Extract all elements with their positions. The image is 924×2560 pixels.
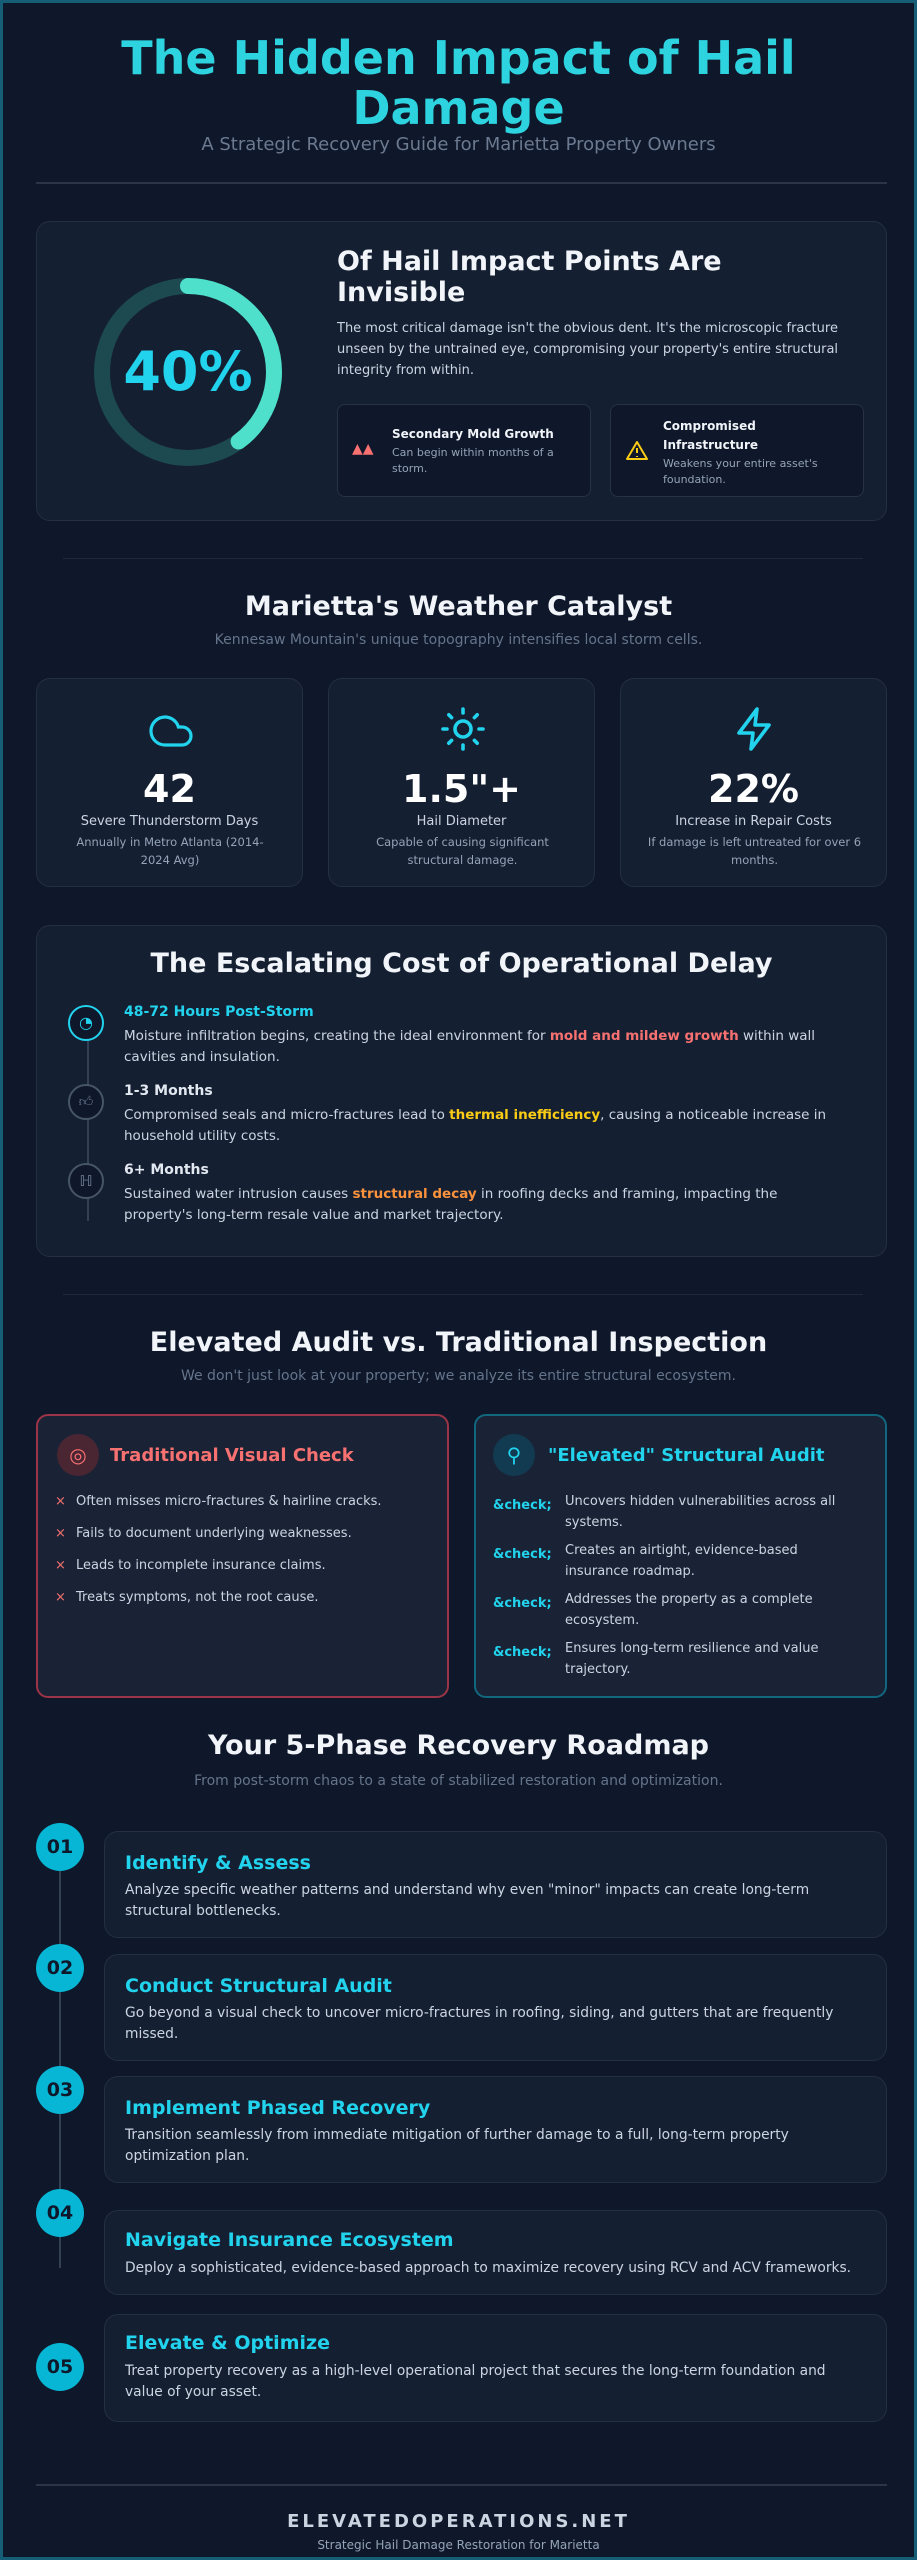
- panel: elevated: [474, 1414, 887, 1698]
- item: 48-72 hours: Moisture infiltration begins, creating the ideal environment for mold and mildew growth within wall cavities and insulation.: [124, 1028, 815, 1065]
- icon: sun: [441, 707, 485, 751]
- item: 48-72 hours: [68, 1004, 815, 1065]
- list: cons: Often misses micro-fractures & hairline cracks.: [76, 1494, 382, 1509]
- list: cons: ×: [55, 1558, 66, 1573]
- icon: thumb: 👍︎: [79, 1094, 93, 1110]
- gauge chart: 40%: [123, 340, 253, 403]
- step 1: [36, 1823, 887, 1938]
- step 3: [36, 2066, 887, 2183]
- icon: eye: ◎: [69, 1443, 87, 1467]
- title: [121, 31, 796, 135]
- list: pros: [493, 1494, 835, 1677]
- panel: elevated: Creates an airtight, evidence-based insurance roadmap.: [565, 1543, 798, 1579]
- icon: search: [493, 1434, 535, 1476]
- footer: ELEVATEDOPERATIONS.NET: [287, 2511, 630, 2532]
- gauge chart: [94, 278, 282, 466]
- mini card: mold: [337, 404, 591, 497]
- heading: The Escalating Cost of Operational Delay: [150, 948, 772, 979]
- item: 1-3 months: 1-3 Months: [124, 1083, 213, 1099]
- list: cons: ×: [55, 1494, 66, 1509]
- panel: traditional: [36, 1414, 449, 1698]
- list: cons: ×: [55, 1526, 66, 1541]
- panel: cost of delay: [36, 925, 887, 1257]
- title: Damage: [352, 81, 565, 135]
- step 5: [36, 2314, 887, 2422]
- step 3: 03: [47, 2079, 73, 2101]
- panel: 40% invisible: [36, 221, 887, 521]
- panel: elevated: "Elevated" Structural Audit: [548, 1445, 824, 1466]
- stat card: 22%: If damage is left untreated for over 6 months.: [648, 835, 861, 867]
- item: 6+ months: Sustained water intrusion causes structural decay in roofing decks and framing, impacting the property's long-term resale value and market trajectory.: [124, 1186, 777, 1223]
- stat card: 22%: 22%: [708, 767, 799, 811]
- panel: elevated: &check;: [493, 1498, 552, 1513]
- heading: weather: Marietta's Weather Catalyst: [245, 591, 672, 622]
- step 3: Transition seamlessly from immediate mitigation of further damage to a full, long-term property optimization plan.: [125, 2127, 789, 2164]
- title: The Hidden Impact of Hail: [121, 31, 796, 85]
- stat card: 1.5: Capable of causing significant structural damage.: [376, 835, 549, 867]
- panel: elevated: Ensures long-term resilience and value trajectory.: [565, 1641, 818, 1677]
- item: 6+ months: 6+ Months: [124, 1162, 209, 1178]
- icon: building: [68, 1163, 104, 1199]
- subheading: We don't just look at your property; we analyze its entire structural ecosystem.: [181, 1368, 736, 1384]
- step 5: Elevate & Optimize: [125, 2332, 330, 2354]
- icon: warning: [626, 441, 648, 460]
- step 2: Conduct Structural Audit: [125, 1975, 392, 1997]
- icon: clock: ◔: [79, 1013, 93, 1032]
- step 1: Identify & Assess: [125, 1852, 311, 1874]
- item: 1-3 months: [68, 1083, 826, 1144]
- panel: traditional: Traditional Visual Check: [110, 1445, 354, 1466]
- list: cons: Leads to incomplete insurance claims.: [76, 1558, 326, 1573]
- step 4: Navigate Insurance Ecosystem: [125, 2229, 454, 2251]
- mini card: infrastructure: Weakens your entire asset's foundation.: [663, 457, 818, 486]
- icon: thumb: [68, 1084, 104, 1120]
- heading: roadmap: Your 5-Phase Recovery Roadmap: [208, 1730, 709, 1761]
- step 4: Deploy a sophisticated, evidence-based approach to maximize recovery using RCV and ACV frameworks.: [125, 2260, 851, 2276]
- stat card: 22%: [620, 678, 887, 887]
- stat card: 42: Annually in Metro Atlanta (2014-2024 Avg): [76, 835, 264, 867]
- item: 48-72 hours: 48-72 Hours Post-Storm: [124, 1004, 314, 1020]
- step 3: Implement Phased Recovery: [125, 2097, 430, 2119]
- step 2: Go beyond a visual check to uncover micro-fractures in roofing, siding, and gutters that are frequently missed.: [125, 2005, 833, 2042]
- panel: elevated: &check;: [493, 1645, 552, 1660]
- stat card: 42: [36, 678, 303, 887]
- panel: elevated: &check;: [493, 1547, 552, 1562]
- step 1: 01: [47, 1836, 73, 1858]
- step 2: [36, 1944, 887, 2061]
- step 4: 04: [47, 2202, 73, 2224]
- footer: [287, 2511, 630, 2552]
- footer: Strategic Hail Damage Restoration for Marietta: [317, 2538, 600, 2552]
- heading: Of Hail Impact Points Are Invisible: [337, 246, 722, 308]
- icon: eye: [57, 1434, 99, 1476]
- stat card: 42: Severe Thunderstorm Days: [81, 814, 258, 829]
- stat card: 1.5: 1.5"+: [402, 767, 521, 811]
- step 2: 02: [47, 1957, 73, 1979]
- panel: elevated: &check;: [493, 1596, 552, 1611]
- panel: elevated: Uncovers hidden vulnerabilities across all systems.: [565, 1494, 835, 1530]
- subheading: Kennesaw Mountain's unique topography intensifies local storm cells.: [215, 632, 702, 648]
- mini card: infrastructure: Compromised Infrastructure: [663, 419, 758, 452]
- panel: elevated: Addresses the property as a complete ecosystem.: [565, 1592, 813, 1628]
- heading: audit comparison: Elevated Audit vs. Traditional Inspection: [150, 1327, 767, 1358]
- icon: clock: [68, 1005, 104, 1041]
- icon: search: ⚲: [507, 1443, 521, 1467]
- subheading: From post-storm chaos to a state of stabilized restoration and optimization.: [194, 1773, 723, 1789]
- description: The most critical damage isn't the obvious dent. It's the microscopic fracture unseen by the untrained eye, compromising your property's entire structural integrity from within.: [337, 321, 838, 378]
- step 4: [36, 2189, 887, 2295]
- list: cons: [55, 1494, 382, 1605]
- step 1: Analyze specific weather patterns and understand why even "minor" impacts can create long-term structural bottlenecks.: [125, 1882, 809, 1919]
- mini card: mold: Can begin within months of a storm.: [392, 446, 554, 475]
- mini card: mold: Secondary Mold Growth: [392, 427, 554, 441]
- step 5: 05: [47, 2356, 73, 2378]
- step 5: Treat property recovery as a high-level operational project that secures the long-term foundation and value of your asset.: [125, 2363, 826, 2400]
- subtitle: A Strategic Recovery Guide for Marietta Property Owners: [201, 134, 716, 155]
- list: cons: ×: [55, 1590, 66, 1605]
- icon: mold: ▲▲: [352, 441, 374, 457]
- icon: lightning: [737, 707, 771, 751]
- item: 1-3 months: Compromised seals and micro-fractures lead to thermal inefficiency, causing a noticeable increase in household utility costs.: [124, 1107, 826, 1144]
- stat card: 22%: Increase in Repair Costs: [675, 814, 832, 829]
- list: cons: Treats symptoms, not the root cause.: [76, 1590, 319, 1605]
- stat card: 42: 42: [143, 767, 196, 811]
- mini card: infrastructure: [610, 404, 864, 497]
- stat card: 1.5: [328, 678, 595, 887]
- stat card: 1.5: Hail Diameter: [417, 814, 506, 829]
- icon: cloud: [149, 715, 193, 747]
- list: cons: Fails to document underlying weaknesses.: [76, 1526, 352, 1541]
- item: 6+ months: [68, 1162, 777, 1223]
- icon: building: ℍ: [79, 1172, 93, 1190]
